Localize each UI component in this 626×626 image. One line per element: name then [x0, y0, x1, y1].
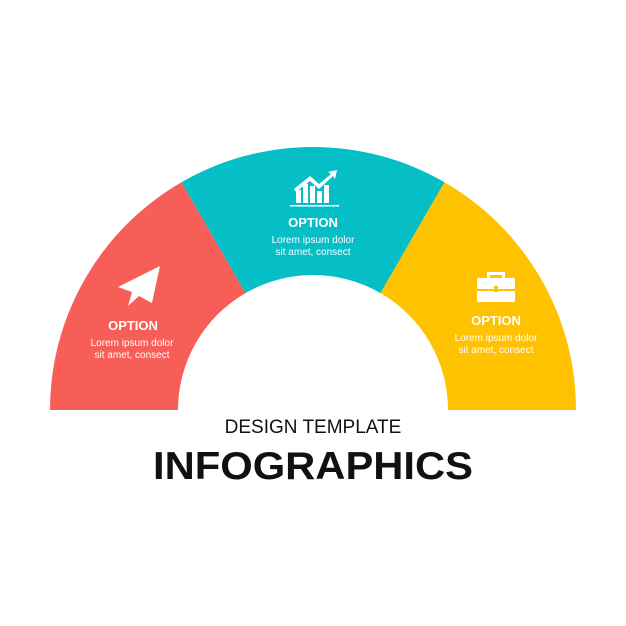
text: teal body: sit amet, consect	[275, 247, 351, 258]
heading: option teal: OPTION	[288, 215, 338, 230]
heading: option yellow: OPTION	[471, 313, 521, 328]
subtitle: DESIGN TEMPLATE	[225, 417, 401, 438]
text: red body: sit amet, consect	[94, 350, 170, 361]
text: yellow body: Lorem ipsum dolor	[455, 333, 538, 344]
text: teal body: Lorem ipsum dolor	[272, 235, 355, 246]
panel: yellow segment	[380, 182, 576, 410]
text: yellow body: sit amet, consect	[458, 345, 534, 356]
title: INFOGRAPHICS	[153, 445, 473, 488]
icon: briefcase	[477, 272, 515, 302]
icon: growth chart	[290, 170, 339, 206]
text: red body: Lorem ipsum dolor	[91, 338, 174, 349]
icon: paper plane	[118, 266, 160, 306]
panel: teal segment	[182, 147, 444, 293]
heading: option red: OPTION	[108, 318, 158, 333]
panel: red segment	[50, 182, 246, 410]
